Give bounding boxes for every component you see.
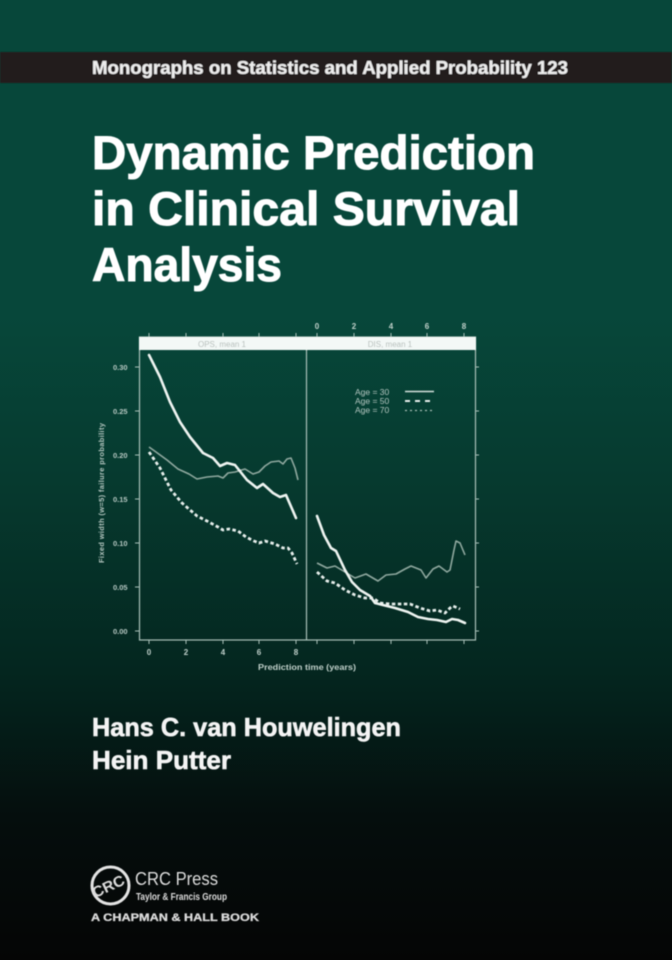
title: in Clinical Survival xyxy=(92,182,520,235)
title xyxy=(92,126,535,291)
series banner xyxy=(0,52,672,83)
x axis: Prediction time (years) xyxy=(258,663,356,672)
authors: Hans C. van Houwelingen xyxy=(92,712,401,742)
x axis xyxy=(147,322,467,672)
publisher logo: CRC Press xyxy=(135,868,218,889)
title: Dynamic Prediction xyxy=(92,126,535,179)
chart: dynamic prediction curves xyxy=(97,322,479,672)
x axis: 8 xyxy=(294,648,299,657)
legend: Age = 30 xyxy=(355,387,390,397)
legend xyxy=(355,387,434,415)
y axis: 0.05 xyxy=(113,583,128,592)
legend: Age = 70 xyxy=(355,405,390,415)
x axis: 0 xyxy=(315,322,320,331)
y axis xyxy=(97,363,479,636)
y axis: Fixed width (w=5) failure probability xyxy=(97,422,106,563)
authors: Hein Putter xyxy=(92,745,231,775)
age 30 left curve xyxy=(149,355,296,518)
chart frame and strip xyxy=(139,337,476,640)
age 50 right curve xyxy=(317,572,460,613)
x axis: 6 xyxy=(425,322,430,331)
x axis: 4 xyxy=(389,322,394,331)
y axis: 0.15 xyxy=(113,495,128,504)
icon: CRC circle: CRC xyxy=(90,872,128,902)
age 70 left curve xyxy=(149,447,298,480)
x axis: 4 xyxy=(221,648,226,657)
y axis: 0.25 xyxy=(113,407,128,416)
x axis: 2 xyxy=(352,322,357,331)
y axis: 0.20 xyxy=(113,451,128,460)
x axis: 8 xyxy=(462,322,467,331)
right panel curves xyxy=(317,516,465,623)
x axis: 0 xyxy=(147,648,152,657)
y axis: 0.10 xyxy=(113,539,128,548)
left panel curves xyxy=(149,355,298,564)
y axis: 0.00 xyxy=(113,627,128,636)
publisher logo xyxy=(90,867,259,924)
x axis: 2 xyxy=(184,648,189,657)
authors xyxy=(92,712,401,775)
x axis: 6 xyxy=(257,648,262,657)
title: Analysis xyxy=(92,238,282,291)
legend: Age = 50 xyxy=(355,396,390,406)
chart frame and strip: DIS, mean 1 xyxy=(368,340,413,349)
age 70 right curve xyxy=(317,541,465,581)
chart frame and strip: OPS, mean 1 xyxy=(198,340,247,349)
y axis: 0.30 xyxy=(113,363,128,372)
publisher logo: A CHAPMAN & HALL BOOK xyxy=(91,912,259,924)
age 30 right curve xyxy=(317,516,465,623)
publisher logo: Taylor & Francis Group xyxy=(136,892,227,903)
series banner: Monographs on Statistics and Applied Probability 123 xyxy=(92,57,568,78)
age 50 left curve xyxy=(149,452,297,564)
